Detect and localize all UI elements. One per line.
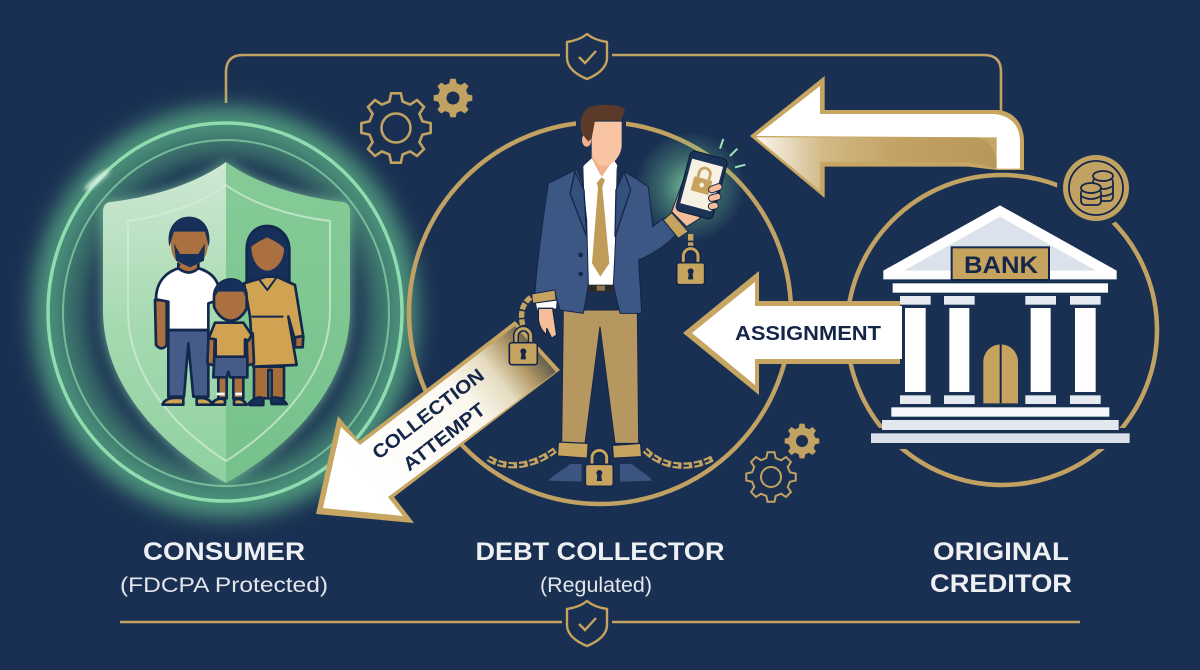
fingers xyxy=(708,183,723,210)
padlock right xyxy=(677,249,705,285)
outline xyxy=(683,271,900,395)
creditor ring xyxy=(847,175,1157,485)
label line two: ATTEMPT xyxy=(399,399,490,476)
door xyxy=(983,344,1018,403)
face xyxy=(592,122,622,166)
panel: consumer protection shield xyxy=(48,122,402,502)
ankle cuff right xyxy=(612,443,642,458)
label line one: COLLECTION xyxy=(369,365,489,464)
jacket buttons xyxy=(578,253,583,276)
arrow: assignment xyxy=(683,271,902,395)
entablature xyxy=(893,283,1108,293)
ankle cuff left xyxy=(557,442,588,458)
shoes xyxy=(548,464,652,482)
padlock ankles xyxy=(585,450,613,486)
phone glow xyxy=(635,132,745,242)
inner glow xyxy=(74,146,378,480)
shield right half xyxy=(226,162,350,483)
right cuff xyxy=(663,213,688,238)
gap behind head xyxy=(576,110,626,132)
footer divider xyxy=(120,621,1080,623)
child xyxy=(207,279,254,405)
heading: DEBT COLLECTOR xyxy=(476,538,724,566)
top connector frame xyxy=(226,55,1001,112)
outline xyxy=(316,321,560,523)
shirt xyxy=(583,166,617,287)
subheading: (Regulated) xyxy=(540,574,652,597)
collector ring xyxy=(409,122,791,504)
man xyxy=(155,217,221,405)
label: consumer xyxy=(120,538,328,597)
panel: creditor circle xyxy=(847,149,1157,485)
inner ring xyxy=(63,140,389,486)
wrist chain left xyxy=(522,297,531,325)
ear xyxy=(582,133,591,147)
woman xyxy=(244,226,303,405)
jacket xyxy=(535,169,678,313)
heading line two: CREDITOR xyxy=(930,570,1072,598)
arrow gold lower xyxy=(756,137,997,191)
bank sign xyxy=(952,247,1049,280)
arrow white upper xyxy=(756,86,1020,169)
arrow: collection attempt xyxy=(316,321,560,523)
gap behind bank base xyxy=(860,428,1140,449)
icon: top shield xyxy=(567,34,607,79)
fill xyxy=(323,326,556,516)
outer ring xyxy=(48,123,402,501)
pediment xyxy=(883,205,1117,279)
floor chain left inner xyxy=(488,450,555,465)
floor chain left xyxy=(488,450,555,465)
floor chain right xyxy=(645,450,713,466)
label: debt collector xyxy=(476,538,724,597)
lapel left xyxy=(570,172,587,237)
heading line one: ORIGINAL xyxy=(933,538,1069,566)
lapel right xyxy=(615,172,631,237)
subheading: (FDCPA Protected) xyxy=(120,574,328,597)
icon: large outline gear xyxy=(361,93,431,163)
icon: small filled gear xyxy=(434,79,472,117)
belt xyxy=(588,285,614,292)
icon: outline gear lower xyxy=(746,452,796,502)
columns xyxy=(900,296,1101,404)
hair xyxy=(581,105,625,142)
padlock left xyxy=(509,329,537,365)
coins badge xyxy=(1057,149,1135,227)
phone signal xyxy=(720,139,745,167)
tie xyxy=(592,177,609,277)
phone xyxy=(675,150,728,220)
icon: debt collector figure xyxy=(488,105,745,486)
label: original creditor xyxy=(930,538,1072,598)
arrow outline xyxy=(750,76,1024,198)
trousers xyxy=(562,310,639,443)
icon: bottom shield xyxy=(567,601,607,646)
left cuff xyxy=(532,290,556,303)
shield inner border xyxy=(128,185,330,461)
collar xyxy=(584,158,617,187)
icon: bank building xyxy=(871,205,1130,443)
fill xyxy=(692,282,902,385)
heading: CONSUMER xyxy=(143,538,305,566)
text: bank sign: BANK xyxy=(964,252,1039,279)
floor chain right inner xyxy=(645,450,713,466)
neck xyxy=(592,150,615,177)
left hand xyxy=(538,308,557,338)
steps xyxy=(871,407,1130,443)
pediment inner xyxy=(904,217,1096,271)
left shirt cuff xyxy=(536,301,557,310)
ring flare xyxy=(83,167,111,193)
shield left half xyxy=(103,162,226,483)
arrow: top curved arrow xyxy=(750,76,1024,198)
right hand palm xyxy=(672,180,700,227)
door split xyxy=(998,344,1004,403)
belt buckle xyxy=(597,286,605,291)
outer glow xyxy=(48,122,402,502)
label: ASSIGNMENT xyxy=(735,323,881,345)
panel: debt collector circle xyxy=(409,110,791,504)
wrist chain right xyxy=(683,234,699,251)
icon: filled gear lower xyxy=(785,424,819,458)
shield glow xyxy=(103,162,350,483)
icon: family xyxy=(155,217,303,405)
